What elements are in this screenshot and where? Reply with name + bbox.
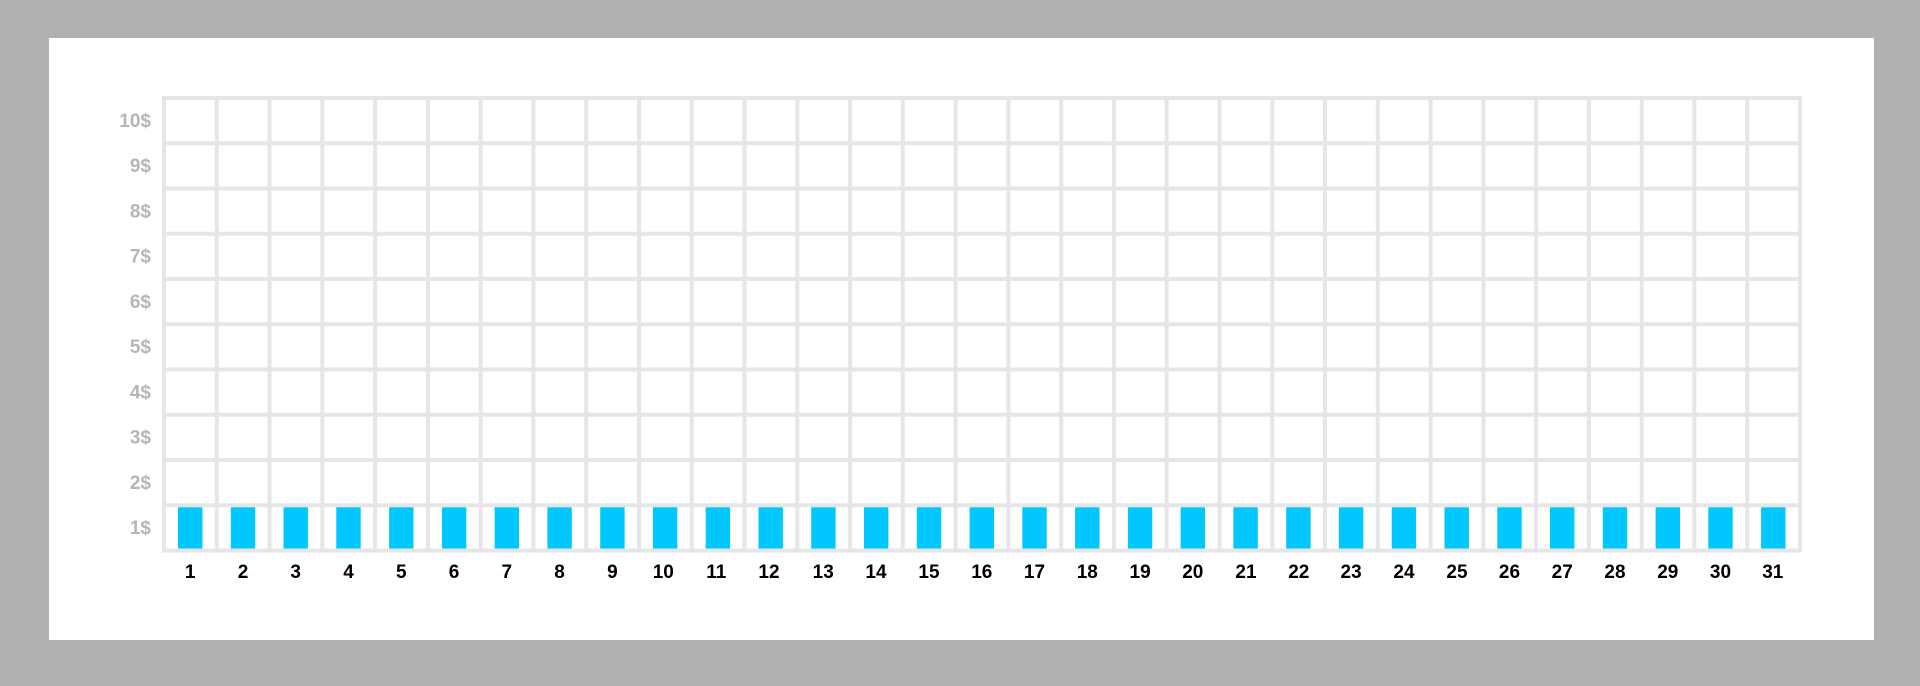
x axis day labels: 6 — [449, 562, 459, 583]
x axis day labels: 2 — [238, 562, 248, 583]
x axis day labels: 10 — [653, 562, 674, 583]
y axis dollar labels: 2$ — [130, 473, 151, 494]
y axis dollar labels: 9$ — [130, 156, 151, 177]
x axis day labels: 12 — [758, 562, 780, 583]
x axis day labels: 8 — [554, 562, 565, 583]
x axis day labels: 15 — [918, 562, 940, 583]
y axis dollar labels: 5$ — [130, 337, 151, 358]
x axis day labels: 9 — [607, 562, 618, 583]
x axis day labels: 7 — [502, 562, 512, 583]
x axis day labels: 26 — [1499, 562, 1520, 583]
x axis day labels: 3 — [290, 562, 301, 583]
blue bars: each day at 1$ — [178, 507, 1786, 548]
x axis day labels: 25 — [1446, 562, 1468, 583]
y axis dollar labels — [119, 111, 151, 539]
x axis day labels: 28 — [1604, 562, 1626, 583]
y axis dollar labels: 7$ — [130, 247, 151, 268]
y axis dollar labels: 1$ — [130, 518, 151, 539]
x axis day labels: 1 — [185, 562, 196, 583]
y axis dollar labels: 6$ — [130, 292, 151, 313]
x axis day labels: 23 — [1341, 562, 1362, 583]
x axis day labels: 24 — [1393, 562, 1415, 583]
x axis day labels: 11 — [706, 562, 727, 583]
y axis dollar labels: 10$ — [119, 111, 151, 132]
x axis day labels: 21 — [1235, 562, 1257, 583]
x axis day labels: 14 — [865, 562, 887, 583]
x axis day labels: 22 — [1288, 562, 1309, 583]
x axis day labels: 16 — [971, 562, 992, 583]
chart grid — [162, 96, 1802, 552]
x axis day labels: 17 — [1024, 562, 1045, 583]
x axis day labels: 27 — [1552, 562, 1573, 583]
x axis day labels: 13 — [813, 562, 834, 583]
x axis day labels: 18 — [1077, 562, 1098, 583]
x axis day labels: 29 — [1657, 562, 1678, 583]
x axis day labels: 5 — [396, 562, 407, 583]
x axis day labels: 30 — [1710, 562, 1731, 583]
y axis dollar labels: 8$ — [130, 202, 151, 222]
x axis day labels: 31 — [1762, 562, 1784, 583]
x axis day labels: 4 — [343, 562, 354, 583]
y axis dollar labels: 4$ — [130, 382, 151, 404]
x axis day labels — [185, 562, 1784, 583]
x axis day labels: 19 — [1130, 562, 1151, 583]
x axis day labels: 20 — [1182, 562, 1203, 583]
y axis dollar labels: 3$ — [130, 428, 151, 449]
